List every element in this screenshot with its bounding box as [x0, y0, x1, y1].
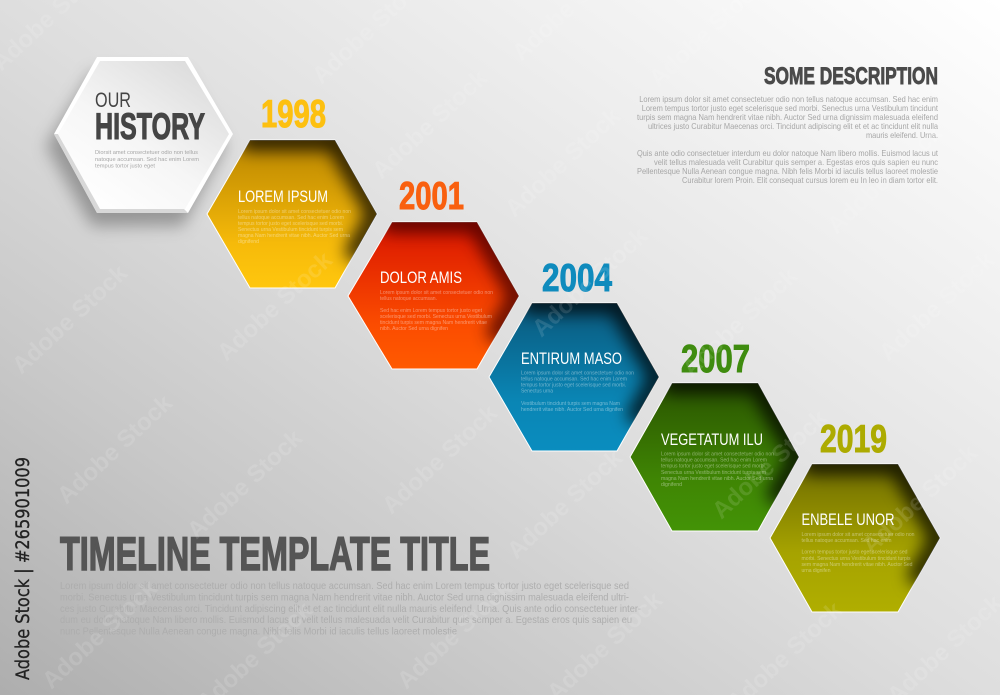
text block: description: Lorem tempus tortor justo eget scelerisque sed morbi. Senectus urna Vestibulum tincidunt — [642, 103, 939, 113]
panel: 2004 entirum maso hexagon — [489, 303, 659, 451]
body text: Senectus urna Vestibulum tincidunt turpis sem — [661, 470, 766, 476]
panel: 2001 dolor amis hexagon — [348, 222, 519, 369]
body text: Lorem ipsum dolor sit amet consectetuer odio non — [380, 290, 493, 296]
year: 2001: 2001 — [399, 175, 464, 218]
body text: morbi. Senectus urna Vestibulum tincidunt turpis — [802, 556, 911, 562]
body text — [521, 370, 634, 413]
body text — [380, 290, 493, 332]
body text — [238, 209, 351, 245]
text block: description: Lorem ipsum dolor sit amet consectetuer odio non tellus natoque accumsan. Sed hac enim — [639, 94, 938, 104]
watermark pattern: Adobe Stock — [367, 64, 493, 184]
body text: tellus natoque accumsan. Sed hac enim — [802, 538, 892, 544]
body text: Vestibulum tincidunt turpis sem magna Nam — [521, 401, 620, 407]
body text: Senectus urna — [521, 388, 553, 394]
text block: timeline description: morbi. Senectus urna Vestibulum tincidunt turpis sem magna Nam hendrerit vitae nibh. Auctor Sed urna dignissim malesuada eleifend ultri- — [60, 592, 629, 604]
text block: timeline description: dum eu dolor natoque Nam libero mollis. Euismod lacus ut velit tellus malesuada velit Curabitur quis semper a. Egestas eros quis sapien eu — [60, 615, 632, 626]
body text — [802, 532, 915, 574]
body text: Lorem ipsum dolor sit amet consectetuer odio non — [521, 370, 634, 376]
body text: Lorem tempus tortor justo eget scelerisque sed — [802, 550, 908, 556]
watermark pattern: Adobe Stock — [212, 246, 338, 366]
body text: scelerisque sed morbi. Senectus urna Vestibulum — [380, 314, 492, 320]
text block: description: turpis sem magna Nam hendrerit vitae nibh. Auctor Sed urna dignissim malesuada eleifend — [637, 112, 938, 122]
panel: our history hexagon — [46, 57, 233, 226]
watermark pattern: Adobe Stock — [677, 262, 803, 382]
panel: 2007 vegetatum ilu hexagon — [630, 383, 799, 531]
body text: dignifend — [238, 239, 259, 245]
body text — [661, 452, 774, 488]
body text: tempus tortor justo eget scelerisque sed morbi. — [661, 464, 766, 470]
heading: history: HISTORY — [95, 106, 205, 147]
stock id label: Adobe Stock | #265901009 — [13, 457, 34, 680]
watermark pattern: Adobe Stock — [822, 119, 948, 239]
heading: our: OUR — [95, 89, 131, 112]
body text: magna Nam hendrerit vitae nibh. Auctor Sed urna — [661, 476, 773, 482]
title: ENBELE UNOR — [802, 511, 895, 529]
body text: tempus tortor justo eget scelerisque sed morbi. — [238, 221, 343, 227]
watermark pattern: Adobe Stock — [502, 444, 628, 564]
text block: timeline description — [60, 581, 641, 638]
text block: description: mauris eleifend. Urna. — [866, 130, 938, 140]
body text: Lorem ipsum dolor sit amet consectetuer odio non — [661, 452, 774, 458]
watermark pattern: Adobe Stock — [377, 399, 503, 519]
watermark pattern: Adobe Stock — [182, 424, 308, 544]
text block: description: ultrices justo Curabitur Maecenas orci. Tincidunt adipiscing elit et et ac tincidunt elit nulla — [648, 121, 938, 131]
watermark pattern: Adobe Stock — [7, 259, 133, 379]
body text: Lorem ipsum dolor sit amet consectetuer odio non — [238, 209, 351, 215]
body text: tellus natoque accumsan. Sed hac enim Lorem — [661, 458, 767, 464]
text block: description: velit tellus malesuada velit Curabitur quis semper a. Egestas eros quis sapien eu nunc — [654, 157, 938, 167]
watermark pattern: Adobe Stock — [857, 439, 983, 559]
body text: Lorem ipsum dolor sit amet consectetuer odio non — [802, 532, 915, 538]
watermark pattern: Adobe Stock — [500, 102, 626, 222]
title: DOLOR AMIS — [380, 269, 462, 287]
watermark pattern: Adobe Stock — [527, 222, 653, 342]
history description: natoque accumsan. Sed hac enim Lorem — [95, 157, 199, 163]
body text: dignifend — [661, 482, 682, 488]
body text: tempus tortor justo eget scelerisque sed morbi. — [521, 382, 626, 388]
text block: description: Quis ante odio consectetuer interdum eu dolor natoque Nam libero mollis. Euismod lacus ut — [637, 148, 939, 158]
body text: Senectus urna Vestibulum tincidunt turpis sem — [238, 227, 343, 233]
history description: Diorsit amet consectetuer odio non tellus — [95, 150, 198, 156]
body text: urna dignifen — [802, 568, 831, 574]
heading: some description: SOME DESCRIPTION — [764, 63, 938, 90]
year: 2019: 2019 — [820, 418, 887, 461]
title: VEGETATUM ILU — [661, 431, 763, 449]
body text: nibh. Auctor Sed urna dignifen — [380, 326, 448, 332]
watermark pattern: Adobe Stock — [874, 246, 1000, 366]
text block: timeline description: nunc Pellentesque Nulla Aenean congue magna. Nibh felis Morbi id iaculis tellus laoreet molestie — [60, 626, 457, 638]
text block: timeline description: Lorem ipsum dolor sit amet consectetuer odio non tellus natoque accumsan. Sed hac enim Lorem tempus tortor justo eget scelerisque sed — [60, 581, 629, 592]
panel: 2019 enbele unor hexagon — [770, 464, 940, 612]
title: LOREM IPSUM — [238, 188, 328, 206]
watermark pattern: Adobe Stock — [707, 404, 833, 524]
history description: tempus tortor justo eget — [95, 164, 155, 170]
watermark pattern: Adobe Stock — [52, 389, 178, 509]
watermark pattern: Adobe Stock — [37, 574, 163, 694]
text block: description: Curabitur lorem Proin. Elit consequat cursus lorem eu In leo in diam tortor elit. — [682, 175, 938, 185]
text block: timeline description: ces justo Curabitur Maecenas orci. Tincidunt adipiscing elit et et ac tincidunt elit nulla mauris eleifend. Urna. Quis ante odio consectetuer inter- — [60, 604, 641, 615]
body text: magna Nam hendrerit vitae nibh. Auctor Sed urna — [238, 233, 350, 239]
year: 2004: 2004 — [542, 257, 612, 300]
title: timeline template title: TIMELINE TEMPLATE TITLE — [60, 527, 490, 580]
text block: description — [637, 94, 939, 185]
year: 2007: 2007 — [681, 338, 750, 381]
body text: hendrerit vitae nibh. Auctor Sed urna dignifen — [521, 407, 623, 413]
panel: 1998 lorem ipsum hexagon — [207, 140, 377, 288]
year: 1998: 1998 — [261, 93, 326, 136]
text block: description: Pellentesque Nulla Aenean congue magna. Nibh felis Morbi id iaculis tellus laoreet molestie — [637, 166, 938, 176]
body text: tincidunt turpis sem magna Nam hendrerit vitae — [380, 320, 487, 326]
title: ENTIRUM MASO — [521, 350, 622, 368]
watermark pattern: Adobe Stock — [392, 574, 518, 694]
body text: Sed hac enim Lorem tempus tortor justo eget — [380, 308, 483, 314]
history description — [95, 150, 199, 170]
body text: tellus natoque accumsan. Sed hac enim Lorem — [521, 376, 627, 382]
body text: tellus natoque accumsan. Sed hac enim Lorem — [238, 215, 344, 221]
body text: sem magna Nam hendrerit vitae nibh. Auctor Sed — [802, 562, 913, 568]
body text: tellus natoque accumsan. — [380, 296, 437, 302]
